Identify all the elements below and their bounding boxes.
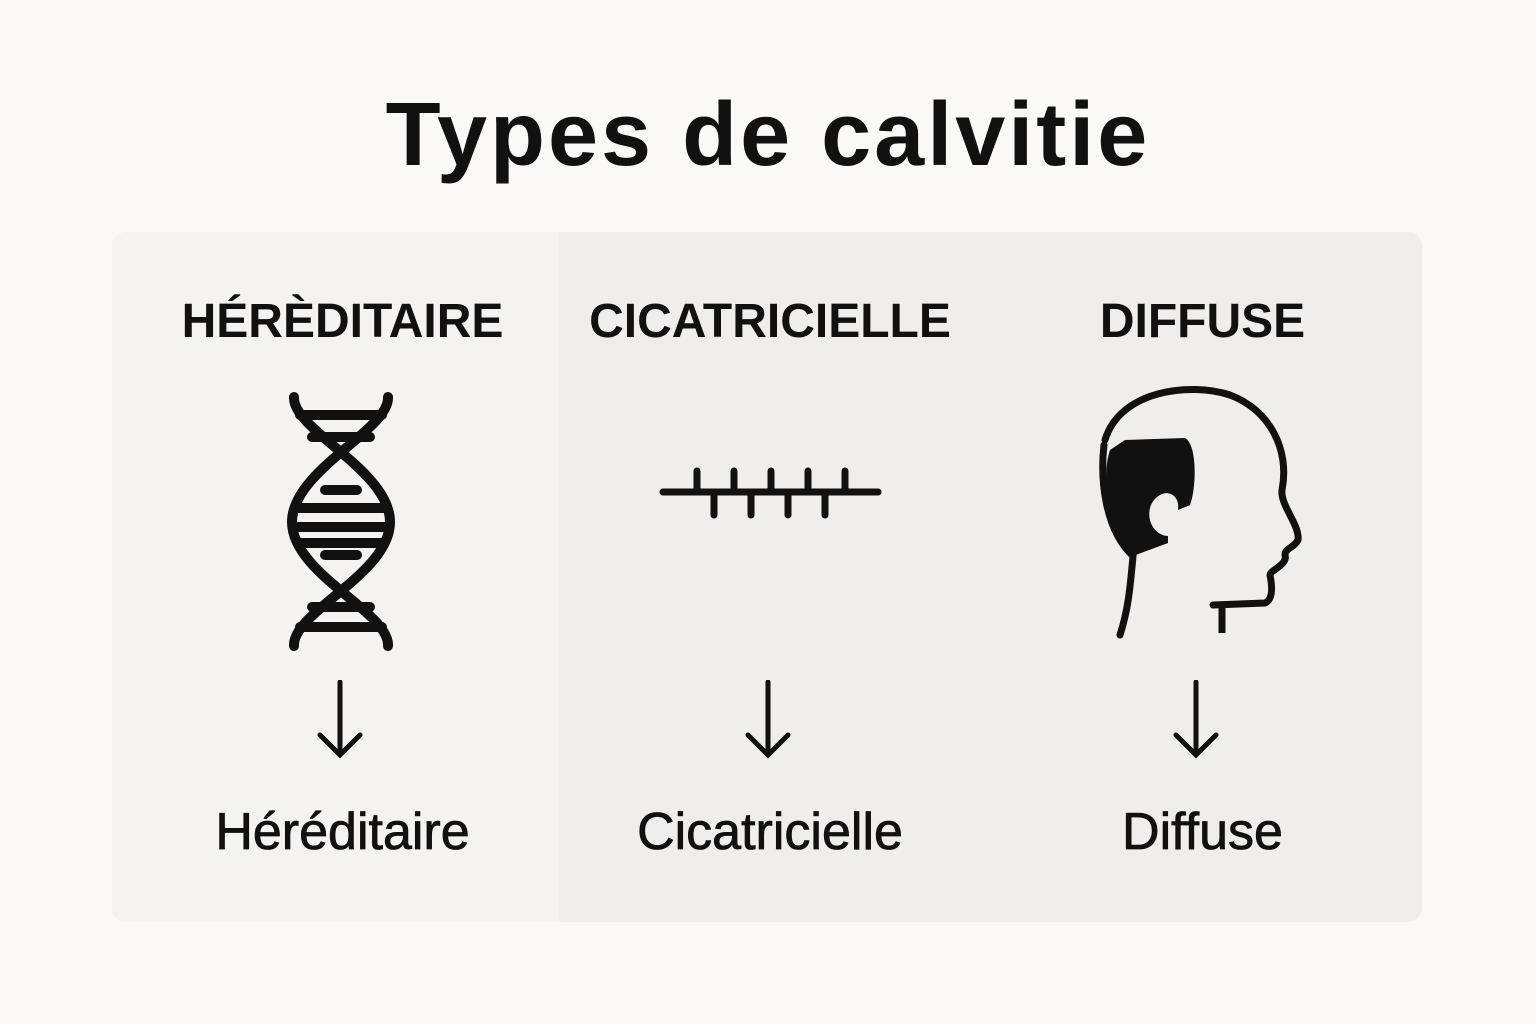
heading: héréditaire: HÉRÈDITAIRE	[182, 295, 503, 348]
icon: DNA	[287, 392, 395, 651]
icon: scar	[660, 468, 882, 518]
icon: head	[1099, 386, 1302, 638]
panel: left column background	[112, 232, 559, 922]
arrow 3	[1174, 680, 1218, 758]
arrow 2	[746, 680, 790, 758]
heading: diffuse: DIFFUSE	[1100, 295, 1305, 348]
arrow 1	[318, 680, 362, 758]
panel	[112, 232, 1422, 922]
label: Diffuse: Diffuse	[1122, 803, 1283, 861]
label: Héréditaire: Héréditaire	[215, 803, 470, 861]
heading: cicatricielle: CICATRICIELLE	[589, 295, 951, 348]
title: Types de calvitie	[386, 85, 1150, 185]
arrows	[318, 680, 1218, 758]
label: Cicatricielle: Cicatricielle	[637, 803, 903, 861]
